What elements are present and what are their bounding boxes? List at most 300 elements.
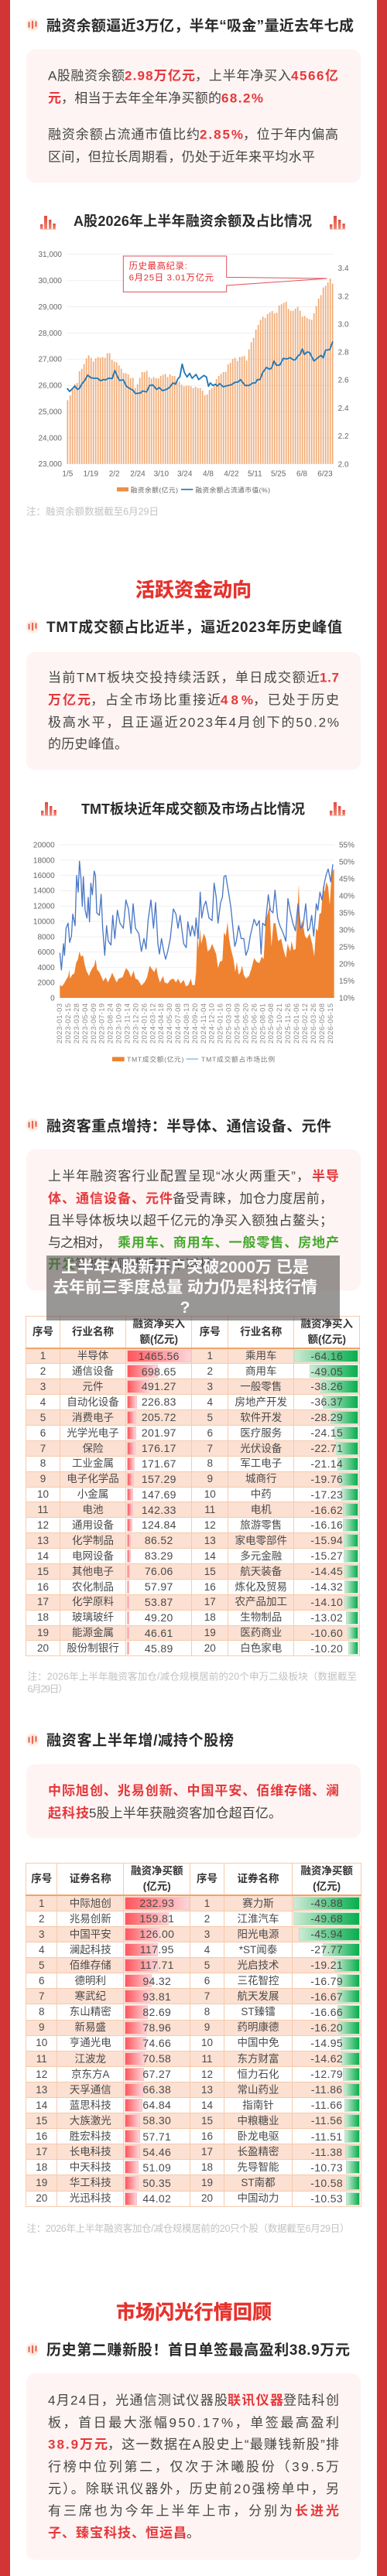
table: stock net buying: 光迅科技: [70, 2192, 111, 2204]
table: sector net buying: 7: [207, 1443, 213, 1454]
table: stock net buying: 天孚通信: [70, 2084, 111, 2096]
table: stock net buying: 5: [39, 1959, 45, 1971]
panel: TMT summary: 万亿元: [48, 693, 91, 708]
chart: margin balance bars and ratio line: 6/8: [296, 470, 307, 478]
table: stock net buying: 64.84: [142, 2099, 171, 2111]
panel: IPO summary: ，这一数据在A股史上“最赚钱新股”排: [108, 2438, 339, 2452]
table: sector net buying: 171.67: [142, 1457, 176, 1470]
chart: margin balance bars and ratio line: 3.4: [338, 265, 349, 273]
panel: IPO summary: 子、臻宝科技、恒运昌: [48, 2525, 187, 2540]
chart 2 date axis labels: 2025-09-08: [266, 1003, 275, 1044]
chart 2 date axis labels: 2023-12-20: [131, 1003, 139, 1044]
table: stock net buying: 12: [36, 2069, 47, 2080]
chart: TMT turnover area and share line: 50%: [339, 858, 354, 866]
chart 2 date axis labels: 2023-06-09: [89, 1003, 98, 1044]
chart: margin balance bars and ratio line: 3.0: [338, 320, 349, 329]
table: sector net buying: 农化制品: [72, 1581, 114, 1593]
table: sector net buying: 炼化及贸易: [235, 1581, 287, 1593]
table: sector net buying: 13: [37, 1535, 49, 1546]
chart 2 legend: [112, 1055, 275, 1064]
table: stock net buying: 19: [36, 2177, 47, 2188]
table: stock net buying: ST臻镭: [241, 2006, 276, 2017]
table: stock net buying: 3: [39, 1929, 45, 1940]
table: stock net buying: 9: [204, 2021, 210, 2033]
table: stock net buying: 亨通光电: [70, 2037, 111, 2048]
panel: sector summary: 开发: [48, 1256, 75, 1272]
table: stock net buying: -16.66: [310, 2006, 343, 2018]
chart: margin balance bars and ratio line: 2.8: [338, 349, 349, 357]
table: stock net buying: 1: [39, 1898, 45, 1909]
chart: TMT turnover area and share line: [33, 841, 354, 1003]
chart 2 date axis labels: 2024-03-12: [148, 1003, 156, 1044]
table: sector net buying: -16.16: [310, 1519, 343, 1531]
table: stock net buying: 2: [39, 1913, 45, 1925]
chart 2 date axis labels: 2024-11-04: [199, 1003, 207, 1044]
table: stock net buying: *ST闻泰: [239, 1944, 277, 1956]
chart: margin balance bars and ratio line: 2.2: [338, 432, 349, 441]
chart: TMT turnover area and share line: 35%: [339, 910, 354, 918]
table: sector net buying: 股份制银行: [67, 1642, 119, 1654]
panel: margin balance summary: 68.2%: [221, 91, 263, 105]
table: sector net buying: -28.29: [310, 1411, 343, 1423]
table: sector net buying: 16: [37, 1581, 49, 1593]
table: stock net buying: 67.27: [142, 2068, 171, 2080]
chart: margin balance bars and ratio line: [38, 251, 349, 494]
table: stock net buying: 兆易创新: [70, 1913, 111, 1925]
table: sector net buying: 83.29: [145, 1549, 173, 1562]
table: sector net buying: 9: [40, 1473, 46, 1484]
note: sector table: 注：2026年上半年融资客加仓/减仓规模居前的20个申万二级板块（数据截至: [28, 1671, 357, 1683]
chart: margin balance bars and ratio line: 2.0: [338, 460, 349, 469]
table: stock net buying: 卧龙电驱: [237, 2130, 279, 2142]
table: sector net buying: 13: [204, 1535, 216, 1546]
chart 2 date axis labels: 2023-10-09: [115, 1003, 122, 1044]
overlay caption: article title: 上半年A股新开户突破2000万 已是: [61, 1259, 309, 1276]
table: sector net buying: 8: [40, 1457, 46, 1469]
table: sector net buying: 15: [204, 1566, 216, 1577]
chart: margin balance bars and ratio line: 31,000: [38, 251, 62, 259]
panel: IPO summary: 元）。除联讯仪器外，历史前20强榜单中，另: [48, 2482, 339, 2496]
chart 2 date axis labels: 2026-05-08: [317, 1003, 326, 1044]
table: stock net buying: -27.77: [310, 1943, 343, 1956]
note: sector table: [28, 1671, 357, 1695]
table: stock net buying: 50.35: [142, 2177, 171, 2189]
table: sector net buying: 10: [204, 1488, 216, 1500]
heading: stock ranking: 融资客上半年增/减持个股榜: [46, 1731, 234, 1749]
table: stock net buying: 7: [204, 1990, 210, 2002]
table: stock net buying: -16.79: [310, 1975, 343, 1987]
table: sector net buying: 医药商业: [240, 1627, 282, 1638]
callout: historic record: 6月25日 3.01万亿元: [129, 273, 214, 283]
chart 2 date axis labels: 2025-10-21: [275, 1003, 283, 1044]
table: sector net buying: 124.84: [142, 1519, 176, 1531]
table: stock net buying: 4: [204, 1944, 210, 1956]
table: stock net buying: 8: [39, 2006, 45, 2017]
table: stock net buying: ST南都: [241, 2177, 276, 2188]
table: sector net buying: -21.14: [310, 1457, 343, 1470]
table: stock net buying: -11.38: [311, 2146, 342, 2158]
table: sector net buying: 20: [37, 1642, 49, 1654]
table: stock net buying: 澜起科技: [70, 1944, 111, 1956]
table: sector net buying: -15.27: [310, 1549, 343, 1562]
section heading: active capital: 活跃资金动向: [135, 579, 252, 601]
panel: sector summary: 等板块则遭遇集中减持: [75, 1257, 213, 1272]
panel: margin balance summary: 融资余额占流通市值比约: [48, 127, 200, 142]
chart 2 date axis labels: 2025-06-26: [249, 1003, 258, 1044]
table: sector net buying: 7: [40, 1443, 46, 1454]
table: stock net buying: -14.62: [310, 2052, 343, 2065]
heading: margin balance: 融资余额逼近3万亿，半年“吸金”量近去年七成: [46, 17, 354, 34]
table: stock net buying: -11.86: [311, 2083, 342, 2096]
table: stock net buying: 10: [201, 2037, 213, 2048]
table: stock net buying: 4: [39, 1944, 45, 1956]
panel: TMT summary: 48%: [221, 693, 253, 708]
table: stock net buying: 8: [204, 2006, 210, 2017]
table: stock net buying: 14: [36, 2099, 47, 2111]
table: stock net buying: 京东方A: [71, 2069, 110, 2080]
table: sector net buying: 15: [37, 1566, 49, 1577]
chart 2 date axis labels: 2023-08-24: [106, 1003, 115, 1044]
table: sector net buying: 53.87: [145, 1596, 173, 1608]
table: sector net buying: 17: [204, 1596, 216, 1607]
chart: margin balance bars and ratio line: 6/23: [317, 470, 333, 478]
table: sector net buying: 电子化学品: [67, 1473, 119, 1484]
chart: TMT turnover area and share line: 6000: [37, 948, 55, 957]
chart 2 date axis labels: 2024-01-26: [139, 1003, 148, 1044]
table: stock net buying: 蓝思科技: [70, 2099, 111, 2111]
table: stock net buying: 3: [204, 1929, 210, 1940]
table: stock net buying: 17: [36, 2146, 47, 2157]
table: sector net buying: 18: [37, 1611, 49, 1623]
table: sector net buying: 46.61: [145, 1627, 173, 1639]
panel: margin balance summary: ，位于年内偏高: [243, 127, 338, 142]
chart 2 date axis labels: 2025-04-09: [232, 1003, 241, 1044]
chart: margin balance bars and ratio line: 23,000: [38, 460, 62, 469]
panel: TMT summary: 当前TMT板块交投持续活跃，单日成交额近: [48, 671, 320, 685]
table: stock net buying: 融资净买额: [131, 1865, 183, 1877]
table: stock net buying: 长盈精密: [237, 2146, 279, 2157]
panel: margin balance summary: ，上半年净买入: [195, 68, 291, 84]
table: stock net buying: 中粮糖业: [237, 2115, 279, 2127]
chart 2 date axis labels: [55, 1003, 334, 1044]
table: sector net buying: -22.71: [310, 1442, 343, 1454]
chart: TMT turnover area and share line: 20%: [339, 961, 354, 969]
table: sector net buying: 商用车: [245, 1365, 277, 1377]
chart title: margin balance: A股2026年上半年融资余额及占比情况: [74, 213, 312, 229]
table: sector net buying: -14.45: [310, 1565, 343, 1577]
table: sector net buying: 其他电子: [72, 1566, 114, 1577]
table: sector net buying: 多元金融: [240, 1550, 282, 1562]
panel: sector summary: 备受青睐，加仓力度居前，: [173, 1191, 333, 1206]
table: sector net buying: 保险: [82, 1443, 103, 1454]
table: stock net buying: 序号: [197, 1873, 217, 1884]
chart: TMT turnover area and share line: 15%: [339, 978, 354, 986]
table: stock net buying: 11: [36, 2053, 47, 2065]
chart 2 date axis labels: 2024-05-30: [165, 1003, 173, 1044]
table: sector net buying: 157.29: [142, 1473, 176, 1485]
table: sector net buying: 698.65: [142, 1365, 176, 1378]
chart: TMT turnover area and share line: 2000: [37, 979, 55, 988]
chart: TMT turnover area and share line: 20000: [33, 841, 55, 849]
chart: TMT turnover area and share line: 10%: [339, 995, 354, 1003]
table: sector net buying: 序号: [33, 1326, 53, 1338]
panel: margin balance summary: [26, 50, 361, 183]
table: sector net buying: 2: [207, 1365, 213, 1377]
table: stock net buying: 13: [201, 2084, 213, 2096]
table: stock net buying: 93.81: [142, 1990, 171, 2003]
panel: stock summary: [26, 1765, 361, 1838]
table: sector net buying: 乘用车: [245, 1350, 277, 1361]
table: stock net buying: [26, 1863, 361, 2207]
table: sector net buying: 8: [207, 1457, 213, 1469]
table: sector net buying: 小金属: [77, 1488, 108, 1500]
table: sector net buying: 航天装备: [240, 1566, 282, 1577]
chart: margin balance bars and ratio line: 4/22: [224, 470, 239, 478]
table: sector net buying: 17: [37, 1596, 49, 1607]
table: sector net buying: 能源金属: [72, 1627, 114, 1638]
table: sector net buying: 消费电子: [72, 1412, 114, 1423]
table: sector net buying: 11: [204, 1504, 215, 1515]
table: stock net buying: 18: [36, 2161, 47, 2173]
table: stock net buying: 江淮汽车: [237, 1913, 279, 1925]
table: sector net buying: 白色家电: [240, 1642, 282, 1654]
table: sector net buying: 中药: [251, 1488, 272, 1500]
table: sector net buying: 序号: [200, 1326, 221, 1338]
table: stock net buying: 长电科技: [70, 2146, 111, 2157]
panel: TMT summary: [26, 652, 361, 770]
panel: sector summary: 乘用车、商用车、一般零售、房地产: [118, 1235, 339, 1250]
table: stock net buying: 19: [201, 2177, 213, 2188]
chart 2 date axis labels: 2026-01-06: [292, 1003, 300, 1044]
chart 2 date axis labels: 2023-07-19: [98, 1003, 106, 1044]
panel: sector summary: 与之相对，: [48, 1235, 111, 1250]
table: sector net buying: 11: [37, 1504, 48, 1515]
table: sector net buying: 行业名称: [72, 1326, 114, 1338]
note: stock table: 注：2026年上半年融资客加仓/减仓规模居前的20只个股（数据截至6月29日）: [26, 2222, 350, 2234]
panel: TMT summary: 的历史峰值。: [48, 737, 128, 752]
chart 2 date axis labels: 2024-12-10: [207, 1003, 216, 1044]
table: sector net buying: 电机: [251, 1504, 272, 1515]
table: sector net buying: 通信设备: [72, 1365, 114, 1377]
chart: margin balance bars and ratio line: 融资余额占流通市值(%): [195, 485, 270, 494]
chart: TMT turnover area and share line: 4000: [37, 964, 55, 972]
chart 2 date axis labels: 2026-03-26: [309, 1003, 317, 1044]
table: stock net buying: 东山精密: [70, 2006, 111, 2017]
table: stock net buying: -10.53: [310, 2192, 343, 2205]
table: sector net buying: 201.97: [142, 1426, 176, 1439]
chart 2 date axis labels: 2024-04-18: [156, 1003, 165, 1044]
table: stock net buying: 18: [201, 2161, 213, 2173]
chart 2 date axis labels: 2024-07-08: [173, 1003, 182, 1044]
table: sector net buying: 9: [207, 1473, 213, 1484]
chart 2 date axis labels: 2026-02-12: [300, 1003, 309, 1044]
panel: margin balance summary: 区间，但拉长周期看，仍处于近年来平均水平: [48, 150, 315, 164]
chart 2 date axis labels: 2025-01-16: [216, 1003, 224, 1044]
overlay caption: article title: 去年前三季度总量 动力仍是科技行情: [53, 1279, 317, 1297]
table: stock net buying: 54.46: [142, 2146, 171, 2158]
panel: TMT summary: ，占全市场比重接近: [91, 693, 221, 708]
table: sector net buying: -13.02: [310, 1611, 343, 1624]
panel: sector summary: 且半导体板块以超千亿元的净买入额独占鳌头；: [48, 1213, 333, 1228]
table: stock net buying: 序号: [31, 1873, 52, 1884]
chart 2 legend: TMT成交额(亿元): [127, 1055, 183, 1064]
table: stock net buying: -49.88: [310, 1897, 343, 1909]
chart 2 date axis labels: 2023-05-04: [80, 1003, 89, 1044]
table: stock net buying: 6: [204, 1975, 210, 1987]
chart: margin balance bars and ratio line: 1/19: [84, 470, 98, 478]
table: sector net buying: 旅游零售: [240, 1519, 282, 1531]
section heading: market highlights: 市场闪光行情回顾: [116, 2302, 272, 2324]
table: stock net buying: (亿元): [143, 1881, 171, 1892]
table: stock net buying: 51.09: [142, 2161, 171, 2174]
callout: historic record: [123, 256, 327, 292]
panel: sector summary: 半导: [312, 1169, 339, 1184]
table: stock net buying: 94.32: [142, 1975, 171, 1987]
chart 2 date axis labels: 2023-02-15: [63, 1003, 72, 1044]
chart: TMT turnover area and share line: 8000: [37, 933, 55, 941]
chart: TMT turnover area and share line: 16000: [33, 872, 55, 880]
table: stock net buying: 航天发展: [237, 1990, 279, 2002]
panel: sector summary: 体、通信设备、元件: [48, 1191, 173, 1206]
table: sector net buying: 19: [37, 1627, 49, 1638]
table: sector net buying: -14.32: [310, 1580, 343, 1593]
table: stock net buying: -16.67: [310, 1990, 343, 2003]
chart: margin balance bars and ratio line: 2.6: [338, 377, 349, 385]
table: stock net buying: 药明康德: [237, 2021, 279, 2033]
panel: margin balance summary: 2.98万亿元: [125, 68, 195, 84]
table: stock net buying: 159.81: [139, 1912, 174, 1925]
table: stock net buying: 融资净买额: [300, 1865, 353, 1877]
table: sector net buying: 76.06: [145, 1565, 173, 1577]
panel: IPO summary: 板，首日最大涨幅950.17%，单签最高盈利: [48, 2415, 339, 2430]
table: stock net buying: -19.21: [310, 1959, 343, 1971]
chart: TMT turnover area and share line: 40%: [339, 892, 354, 900]
table: stock net buying: 17: [201, 2146, 213, 2157]
table: stock net buying: 66.38: [142, 2083, 171, 2096]
table: sector net buying: -10.60: [310, 1627, 343, 1639]
table: sector net buying: 18: [204, 1611, 216, 1623]
panel: IPO summary: [26, 2373, 361, 2560]
table: sector net buying: 45.89: [145, 1642, 173, 1655]
chart: TMT turnover area and share line: 25%: [339, 944, 354, 952]
table: stock net buying: 指南针: [242, 2099, 274, 2111]
overlay caption: article title: [46, 1256, 340, 1320]
panel: sector summary: 上半年融资客行业配置呈现“冰火两重天”，: [48, 1169, 310, 1184]
panel: sector summary: [26, 1150, 361, 1290]
table: sector net buying: 光学光电子: [67, 1427, 119, 1439]
table: sector net buying: 12: [204, 1519, 216, 1531]
chart: TMT turnover area and share line: 55%: [339, 841, 354, 849]
table: sector net buying: 86.52: [145, 1534, 173, 1546]
table: sector net buying: 6: [40, 1427, 46, 1439]
table: sector net buying: 19: [204, 1627, 216, 1638]
table: stock net buying: 10: [36, 2037, 47, 2048]
table: stock net buying: 12: [201, 2069, 213, 2080]
table: sector net buying: 4: [40, 1396, 46, 1408]
table: sector net buying: 化学制品: [72, 1535, 114, 1546]
table: stock net buying: 117.71: [140, 1959, 174, 1971]
chart 2 date axis labels: 2023-03-28: [72, 1003, 80, 1044]
chart: TMT turnover area and share line: 12000: [33, 903, 55, 911]
table: stock net buying: 证券名称: [237, 1873, 279, 1884]
table: sector net buying: 16: [204, 1581, 216, 1593]
table: sector net buying: 电池: [82, 1504, 103, 1515]
table: stock net buying: 126.00: [139, 1928, 174, 1940]
table: sector net buying: 医疗服务: [240, 1427, 282, 1439]
table: stock net buying: 中天科技: [70, 2161, 111, 2173]
table: sector net buying: -10.20: [310, 1642, 343, 1655]
table: sector net buying: 12: [37, 1519, 49, 1531]
chart 2 date axis labels: 2025-11-26: [283, 1003, 292, 1044]
table: stock net buying: 9: [39, 2021, 45, 2033]
chart: margin balance bars and ratio line: 25,000: [38, 408, 62, 416]
table: sector net buying: -14.10: [310, 1596, 343, 1608]
panel: IPO summary: 长进光: [295, 2504, 339, 2519]
table: stock net buying: 中国平安: [70, 1929, 111, 1940]
chart: margin balance bars and ratio line: 2/24: [130, 470, 146, 478]
panel: TMT summary: ，已处于历史: [253, 693, 339, 708]
table: stock net buying: 恒力石化: [237, 2069, 279, 2080]
table: sector net buying: -15.94: [310, 1534, 343, 1546]
table: stock net buying: 中际旭创: [70, 1898, 111, 1909]
table: stock net buying: 57.71: [142, 2130, 171, 2143]
table: sector net buying: 生物制品: [240, 1611, 282, 1623]
table: stock net buying: 70.58: [142, 2052, 171, 2065]
table: sector net buying: 5: [207, 1412, 213, 1423]
table: stock net buying: 1: [204, 1898, 210, 1909]
chart 2 date axis labels: 2026-06-15: [326, 1003, 334, 1044]
table: sector net buying: 176.17: [142, 1442, 176, 1454]
table: sector net buying: 491.27: [142, 1380, 176, 1392]
panel: IPO summary: 38.9万元: [48, 2438, 108, 2452]
table: stock net buying: -49.68: [310, 1912, 343, 1925]
table: sector net buying: -24.15: [310, 1426, 343, 1439]
table: stock net buying: 胜宏科技: [70, 2130, 111, 2142]
table: stock net buying: (亿元): [313, 1881, 341, 1892]
left red border: [0, 0, 10, 2576]
table: sector net buying: 行业名称: [240, 1326, 282, 1338]
table: stock net buying: -10.58: [310, 2177, 343, 2189]
heading: sector additions: 融资客重点增持：半导体、通信设备、元件: [46, 1117, 331, 1135]
table: sector net buying: 14: [204, 1550, 216, 1562]
table: sector net buying: -36.37: [310, 1396, 343, 1408]
table: sector net buying: 6: [207, 1427, 213, 1439]
table: stock net buying: 11: [201, 2053, 212, 2065]
table: stock net buying: -10.73: [310, 2161, 343, 2174]
chart: TMT turnover area and share line: 45%: [339, 875, 354, 883]
table: sector net buying: 融资净买入: [301, 1318, 353, 1330]
table: stock net buying: 13: [36, 2084, 47, 2096]
table: sector net buying: 房地产开发: [235, 1396, 287, 1408]
chart: margin balance bars and ratio line: 4/8: [203, 470, 214, 478]
table: sector net buying: -17.23: [310, 1488, 343, 1501]
chart: TMT turnover area and share line: 10000: [33, 917, 55, 926]
chart: margin balance bars and ratio line: 2/2: [109, 470, 120, 478]
panel: IPO summary: 有三席也为今年上半年上市，分别为: [48, 2504, 293, 2519]
table: sector net buying: 147.69: [142, 1488, 176, 1501]
table: sector net buying: 额(亿元): [308, 1334, 346, 1345]
chart: TMT turnover area and share line: 30%: [339, 927, 354, 935]
panel: stock summary: 起科技: [48, 1806, 89, 1820]
panel: stock summary: 5股上半年获融资客加仓超百亿。: [89, 1806, 282, 1820]
table: sector net buying: 城商行: [245, 1473, 277, 1484]
table: stock net buying: 中国中免: [237, 2037, 279, 2048]
table: stock net buying: 20: [201, 2192, 213, 2204]
panel: margin balance summary: 元: [48, 91, 61, 105]
table: stock net buying: -12.79: [310, 2068, 343, 2080]
chart: TMT turnover area and share line: 18000: [33, 856, 55, 865]
table: stock net buying: -11.66: [311, 2099, 342, 2111]
